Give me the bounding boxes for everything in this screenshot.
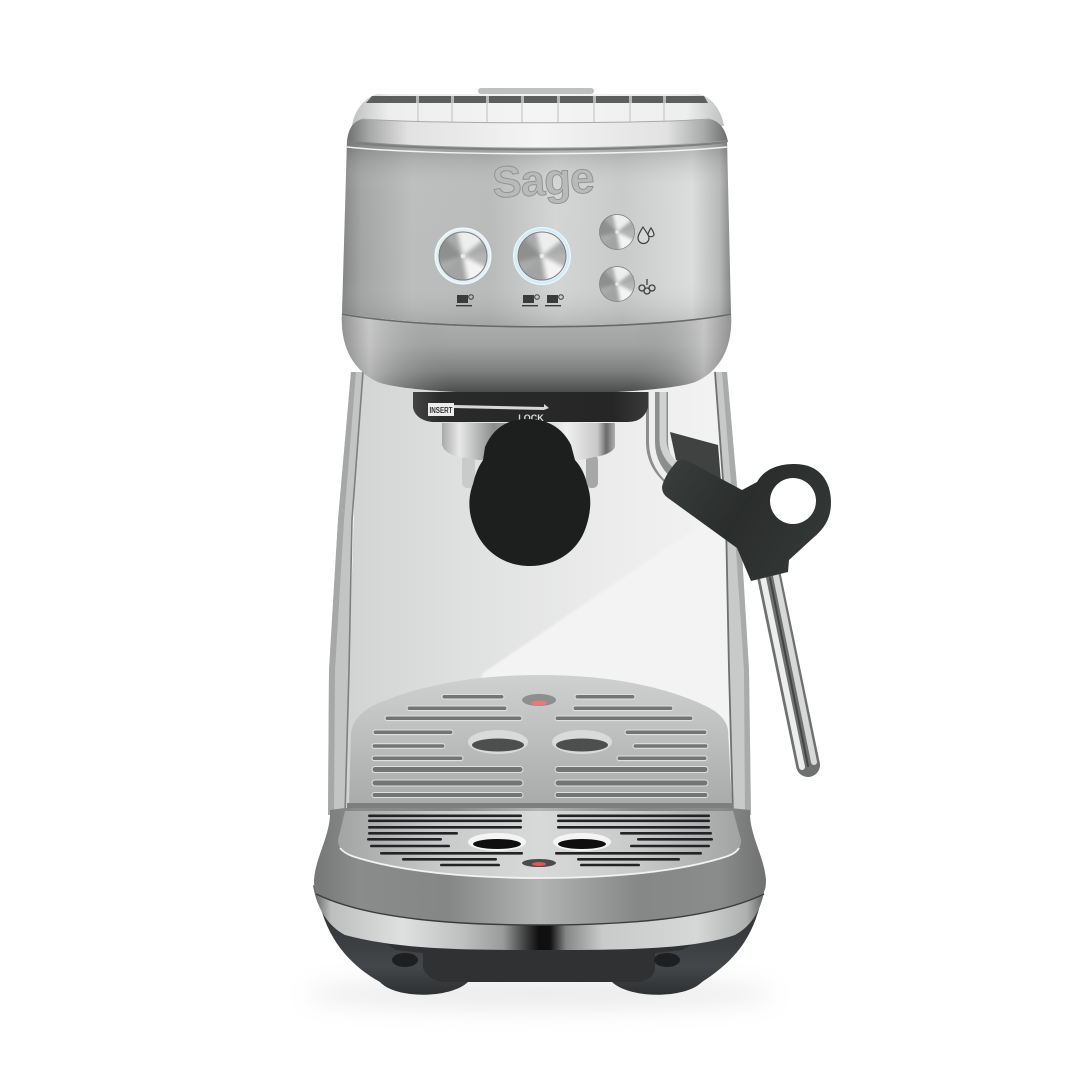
steam wand handle with ring [662,460,831,581]
head: upper water tank lid [347,88,728,150]
insert label [428,403,454,416]
dark lower base [320,905,760,995]
steam pipe [652,392,686,486]
icon: double cups [522,295,563,306]
float indicator [522,694,556,706]
front slots [367,814,713,866]
front oval holes [468,833,611,851]
base: matte shell, polished ring and dark foot [313,808,766,995]
portafilter handle [469,419,590,566]
recess under ring [380,940,700,982]
lock label: LOCK [518,413,544,423]
illustration: espresso machine [313,88,831,1012]
insert label: INSERT [430,406,453,415]
matte shell [314,808,766,925]
icon: water drops [638,227,654,244]
left dial: single shot [423,224,495,288]
reflection of drip tray grate in the back panel [347,675,733,812]
body: stainless back panel and side posts [328,372,751,815]
front float indicator [522,859,556,867]
logo: Sage: Sage [491,153,595,208]
lid glass lip [347,119,728,150]
steam wand bracket [670,432,721,482]
icon: steam [639,279,655,294]
head: main brushed steel housing [342,140,731,394]
polished ring [313,885,765,950]
lock arrow [454,404,549,410]
button: hot water [588,209,640,255]
drip tray front grate [338,811,741,878]
portafilter basket and spouts [442,423,615,488]
grate slots [372,694,708,798]
button: steam [588,261,640,307]
icon: single cup [456,295,473,306]
steam wand tube [763,576,814,767]
right dial: double shot [502,224,574,288]
lid dark ridge [366,96,708,103]
floor shadow [305,979,775,1009]
group head collar [413,392,648,423]
lower head band [342,313,731,394]
oval drain holes [468,730,612,754]
